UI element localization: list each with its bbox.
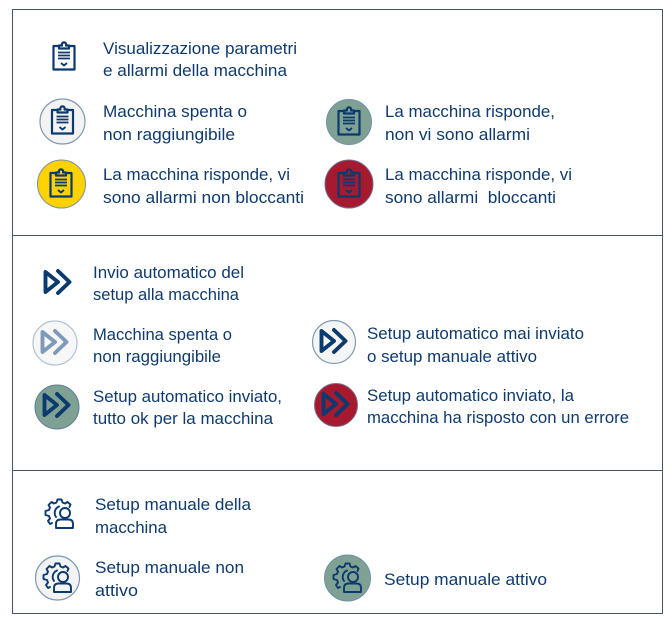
- text: machine off: non raggiungibile: [103, 125, 235, 144]
- text: never sent: o setup manuale attivo: [367, 347, 537, 366]
- text: blocking alarms: La macchina risponde, vi: [385, 165, 572, 184]
- icon: clipboard heading: [54, 42, 74, 70]
- panel: manual setup: [36, 495, 547, 601]
- icon: arrows never sent: [312, 320, 356, 364]
- heading: automatic setup: setup alla macchina: [93, 285, 240, 304]
- icon: gear not active: [36, 556, 80, 600]
- text: machine off: non raggiungibile: [93, 347, 221, 366]
- heading: automatic setup: Invio automatico del: [93, 263, 244, 282]
- icon: gear active: [324, 555, 370, 601]
- heading: parameters and alarms: e allarmi della macchina: [103, 61, 288, 80]
- icon: clipboard green: [326, 100, 372, 144]
- heading: parameters and alarms: Visualizzazione parametri: [103, 39, 297, 58]
- text: no alarms: non vi sono allarmi: [385, 125, 530, 144]
- text: setup sent ok: tutto ok per la macchina: [93, 409, 274, 428]
- text: manual active: Setup manuale attivo: [384, 570, 547, 589]
- icon: arrows green: [35, 385, 79, 429]
- icon: arrows heading: [46, 271, 70, 293]
- icon: clipboard machine off: [40, 99, 85, 144]
- text: non-blocking alarms: sono allarmi non bloccanti: [103, 188, 304, 207]
- icon: clipboard red: [325, 160, 373, 208]
- text: setup sent ok: Setup automatico inviato,: [93, 387, 282, 406]
- text: manual not active: Setup manuale non: [95, 558, 244, 577]
- icon: arrows machine off: [33, 321, 77, 365]
- text: setup error: macchina ha risposto con un errore: [367, 408, 629, 427]
- text: no alarms: La macchina risponde,: [385, 102, 555, 121]
- icon: arrows red: [314, 384, 358, 426]
- text: never sent: Setup automatico mai inviato: [367, 324, 584, 343]
- text: manual not active: attivo: [95, 581, 138, 600]
- text: machine off: Macchina spenta o: [93, 325, 232, 344]
- panel: automatic setup: [33, 263, 629, 429]
- text: machine off: Macchina spenta o: [103, 102, 247, 121]
- icon: gear heading: [46, 500, 73, 528]
- text: blocking alarms: sono allarmi bloccanti: [385, 188, 556, 207]
- panel: machine parameters and alarms: [38, 39, 572, 208]
- text: non-blocking alarms: La macchina risponde, vi: [103, 165, 290, 184]
- heading: manual setup: Setup manuale della: [95, 495, 252, 514]
- icon: clipboard yellow: [38, 160, 86, 208]
- heading: manual setup: macchina: [95, 518, 168, 537]
- text: setup error: Setup automatico inviato, la: [367, 386, 575, 405]
